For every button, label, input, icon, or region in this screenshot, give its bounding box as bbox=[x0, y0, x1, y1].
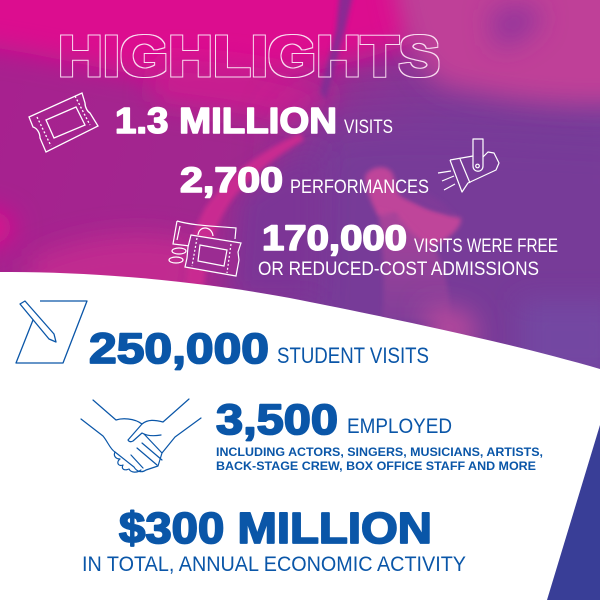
stat: 2,700 performances: PERFORMANCES bbox=[290, 177, 429, 198]
panel: magenta and purple photo background bbox=[0, 0, 600, 400]
stat: 3,500 employed: BACK-STAGE CREW, BOX OFFICE STAFF AND MORE bbox=[216, 459, 536, 473]
stat: 170,000 free or reduced-cost visits: 170,000 bbox=[262, 218, 407, 258]
stat: 3,500 employed bbox=[216, 397, 543, 473]
stat: 2,700 performances bbox=[180, 160, 429, 200]
stat: 3,500 employed: 3,500 bbox=[216, 397, 338, 444]
stat: $300 million economic activity bbox=[82, 505, 466, 576]
stat: 170,000 free or reduced-cost visits: VISITS WERE FREE bbox=[414, 236, 558, 257]
stat: 1.3 million visits: VISITS bbox=[344, 117, 393, 138]
panel: white lower area bbox=[0, 272, 600, 600]
stat: 250,000 student visits bbox=[89, 326, 429, 373]
icon: handshake bbox=[81, 399, 201, 472]
stat: 1.3 million visits: 1.3 MILLION bbox=[115, 100, 337, 141]
stat: $300 million economic activity: $300 MILLION bbox=[119, 505, 432, 553]
icon: stage spotlight bbox=[438, 139, 499, 192]
stat: 3,500 employed: INCLUDING ACTORS, SINGERS, MUSICIANS, ARTISTS, bbox=[216, 445, 543, 459]
icon: money and ticket bbox=[169, 221, 241, 276]
stat: 170,000 free or reduced-cost visits: OR REDUCED-COST ADMISSIONS bbox=[258, 259, 539, 280]
icon: paper and pencil bbox=[16, 301, 87, 363]
stat: 170,000 free or reduced-cost visits bbox=[258, 218, 558, 280]
icon: ticket bbox=[29, 93, 98, 152]
stat: $300 million economic activity: IN TOTAL, ANNUAL ECONOMIC ACTIVITY bbox=[82, 553, 466, 576]
panel: blue corner wedge bbox=[547, 425, 600, 600]
stat: 3,500 employed: EMPLOYED bbox=[347, 415, 452, 438]
stat: 250,000 student visits: 250,000 bbox=[89, 326, 269, 373]
title: HIGHLIGHTS bbox=[58, 24, 440, 88]
stat: 250,000 student visits: STUDENT VISITS bbox=[277, 343, 429, 368]
stat: 2,700 performances: 2,700 bbox=[180, 160, 283, 200]
